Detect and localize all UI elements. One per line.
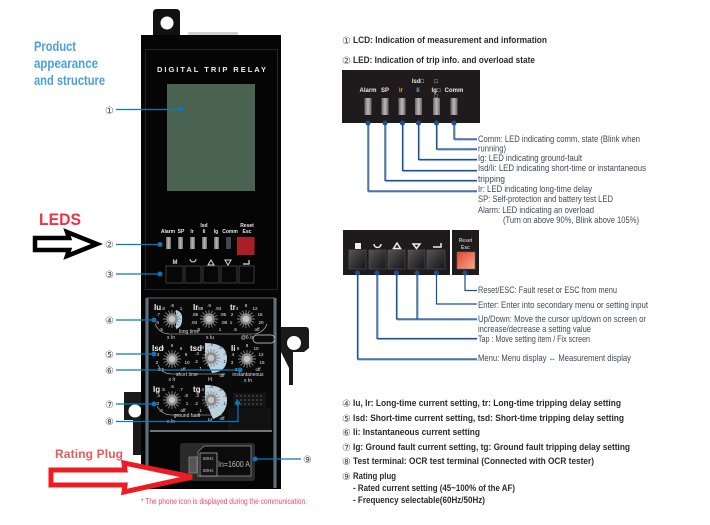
function buttons: M <box>172 260 178 266</box>
setting panel with dials: x Ir <box>169 377 176 383</box>
setting panel with dials <box>150 298 272 430</box>
setting panel with dials: .88 <box>197 306 204 311</box>
sector: tsd <box>205 343 227 373</box>
setting panel with dials: 5 <box>171 343 174 348</box>
title: and structure <box>34 72 105 88</box>
panel: LED detail: □ <box>434 94 438 100</box>
callout 2: ② <box>105 240 114 251</box>
setting panel with dials: .3 <box>195 351 199 356</box>
settings descriptions: Isd: Short-time current setting, tsd: Short-time tripping delay setting <box>353 413 624 424</box>
panel: reset detail: Esc <box>461 245 470 251</box>
setting panel with dials: .1 <box>198 366 202 371</box>
setting panel with dials: 8 <box>245 303 248 308</box>
setting panel with dials: I²t <box>208 418 213 424</box>
button descriptions: Menu: Menu display ↔ Measurement display <box>478 353 631 364</box>
sector: Iu <box>176 310 182 329</box>
setting panel with dials: .98 <box>221 320 228 325</box>
setting panel with dials: 2 <box>156 360 159 365</box>
setting panel with dials: .1 <box>222 401 226 406</box>
LED descriptions: tripping <box>478 174 505 185</box>
setting panel with dials: 1 <box>186 401 189 406</box>
LED descriptions: Comm: LED indicating comm. state (Blink when <box>478 134 640 145</box>
setting panel with dials: .6 <box>170 384 174 389</box>
Rating Plug label: Rating Plug <box>55 447 123 461</box>
setting panel with dials: 6 <box>180 346 183 351</box>
mounting tabs <box>124 9 309 455</box>
callout 6: ⑥ <box>105 366 114 377</box>
LED indicators: Ir <box>190 229 194 235</box>
LED descriptions: Ir: LED indicating long-time delay <box>478 184 592 195</box>
setting panel with dials: .4 <box>209 342 213 347</box>
reset button <box>237 237 254 255</box>
setting panel with dials: .1 <box>198 408 202 413</box>
setting panel with dials: .4 <box>200 345 204 350</box>
title: appearance <box>34 55 98 71</box>
setting panel with dials: 1.5 <box>158 367 165 372</box>
settings descriptions: Ii: Instantaneous current setting <box>353 427 480 438</box>
button descriptions: Reset/ESC: Fault reset or ESC from menu <box>478 285 617 296</box>
setting panel with dials: 8 <box>246 343 249 348</box>
panel: LED detail: Comm <box>445 88 463 94</box>
title <box>34 38 105 88</box>
callout 2 <box>105 240 162 251</box>
panel: reset detail <box>452 230 479 275</box>
setting panel with dials: 10 <box>253 346 259 351</box>
test terminal <box>229 393 270 431</box>
setting panel with dials: 4 <box>232 352 235 357</box>
settings descriptions: Ig: Ground fault current setting, tg: Ground fault tripping delay setting <box>353 442 630 453</box>
setting panel with dials: .3 <box>218 387 222 392</box>
LED indicators: Alarm <box>161 229 176 235</box>
panel: LED detail: □ <box>434 79 438 85</box>
setting panel with dials: off <box>255 367 261 372</box>
callout 8: ⑧ <box>105 417 114 428</box>
setting panel with dials: Isd <box>152 344 164 353</box>
description: LED: LED: Indication of trip info. and overload state <box>353 55 535 66</box>
LED indicators: Ii <box>203 229 206 235</box>
callout 1: ① <box>105 106 114 117</box>
callout 4: ④ <box>105 316 114 327</box>
settings descriptions: Rating plug <box>353 471 396 482</box>
setting panel with dials: 4 <box>162 346 165 351</box>
rating plug: 60Hz <box>203 456 214 461</box>
setting panel with dials: .3 <box>195 393 199 398</box>
function buttons <box>166 259 254 283</box>
panel: LED detail: Ir <box>399 88 404 94</box>
settings descriptions: - Rated current setting (45~100% of the AF) <box>353 483 515 494</box>
settings descriptions: - Frequency selectable(60Hz/50Hz) <box>353 495 485 506</box>
setting panel with dials: .9 <box>170 303 174 308</box>
setting panel with dials: .7 <box>156 312 160 317</box>
setting panel with dials: instantaneous <box>232 372 264 378</box>
setting panel with dials: off <box>180 408 186 413</box>
LED descriptions: SP: Self-protection and battery test LED <box>478 194 613 205</box>
button descriptions: Tap : Move setting item / Fix screen <box>478 334 590 345</box>
setting panel with dials: .5 <box>233 327 237 332</box>
sector: tg <box>205 385 227 419</box>
setting panel with dials: 6 <box>237 346 240 351</box>
button descriptions: increase/decrease a setting value <box>478 324 591 335</box>
setting panel with dials: 10 <box>184 360 190 365</box>
device: digital trip relay <box>124 9 309 489</box>
setting panel with dials: .4 <box>209 384 213 389</box>
setting panel with dials: long time <box>179 329 199 335</box>
panel: LED detail <box>342 70 480 123</box>
relay body <box>141 35 281 489</box>
settings descriptions: ⑦ <box>342 443 351 454</box>
setting panel with dials: .2 <box>223 351 227 356</box>
settings descriptions: Test terminal: OCR test terminal (Connected with OCR tester) <box>353 456 594 467</box>
setting panel with dials: .83 <box>191 320 198 325</box>
setting panel with dials: .6 <box>155 320 159 325</box>
LED descriptions <box>478 134 646 226</box>
setting panel with dials: 12 <box>258 352 264 357</box>
panel: reset detail: Reset <box>459 238 473 244</box>
LED indicators <box>161 223 254 249</box>
callout 5: ⑤ <box>105 350 114 361</box>
callout 4 <box>105 316 156 327</box>
LED indicators: Esc <box>243 229 252 235</box>
setting panel with dials: 2 <box>231 312 234 317</box>
LED descriptions: Ig: LED indicating ground-fault <box>478 153 582 164</box>
callout 8 <box>105 400 240 428</box>
callout 6 <box>105 366 242 377</box>
callout 3 <box>105 270 162 281</box>
LED indicators: SP <box>178 229 185 235</box>
callout 1 <box>105 106 184 117</box>
LEDS label: LEDS <box>39 210 81 229</box>
setting panel with dials: .4 <box>200 387 204 392</box>
transparent cover <box>145 298 277 488</box>
settings descriptions: ④ <box>342 399 351 410</box>
setting panel with dials: .7 <box>179 387 183 392</box>
button descriptions: Up/Down: Move the cursor up/down on screen or <box>478 314 646 325</box>
setting panel with dials: 1 <box>180 306 183 311</box>
setting panel with dials: 16 <box>257 312 263 317</box>
LCD screen <box>167 84 255 191</box>
setting panel with dials: off <box>254 327 260 332</box>
setting panel with dials: .2 <box>159 408 163 413</box>
LED indicators: Reset <box>240 223 254 229</box>
arrow: red to rating plug <box>51 463 192 492</box>
setting panel with dials: Ii <box>231 344 235 353</box>
setting panel with dials: tsd <box>190 344 202 353</box>
settings descriptions <box>342 398 630 506</box>
LED indicators: Isd <box>200 223 208 229</box>
settings descriptions: ⑥ <box>342 428 351 439</box>
LED indicators: Comm <box>222 229 238 235</box>
setting panel with dials: .8 <box>184 393 188 398</box>
setting panel with dials: 1 <box>219 327 222 332</box>
setting panel with dials: .8 <box>196 327 200 332</box>
setting panel with dials: .93 <box>215 306 222 311</box>
settings descriptions: ⑤ <box>342 414 351 425</box>
setting panel with dials: 4 <box>236 306 239 311</box>
arrow: black to LEDs <box>35 232 97 256</box>
button descriptions <box>478 285 648 364</box>
button descriptions: Enter: Enter into secondary menu or setting input <box>478 300 648 311</box>
setting panel with dials: Iu <box>154 303 161 312</box>
setting panel with dials: .95 <box>220 312 227 317</box>
setting panel with dials: .2 <box>223 393 227 398</box>
device heading: DIGITAL TRIP RELAY <box>157 65 266 74</box>
setting panel with dials: off <box>180 367 186 372</box>
setting panel with dials: .3 <box>218 345 222 350</box>
setting panel with dials: x In <box>244 378 252 384</box>
rating plug: 50Hz <box>203 468 214 473</box>
callout 7: ⑦ <box>105 400 114 411</box>
LED descriptions: Isd/Ii: LED indicating short-time or instantaneous <box>478 163 646 174</box>
setting panel with dials: 1 <box>230 320 233 325</box>
setting panel with dials: 3 <box>157 352 160 357</box>
connector lines: LED <box>366 120 477 192</box>
callout 5 <box>105 350 156 361</box>
setting panel with dials: ground fault <box>174 413 201 419</box>
setting panel with dials: 3 <box>231 360 234 365</box>
panel: LED detail: Alarm <box>359 88 377 94</box>
setting panel with dials: I²t <box>208 377 213 383</box>
setting panel with dials: .9 <box>207 303 211 308</box>
panel: LED detail: Ii <box>416 88 420 94</box>
callout 9: ⑨ <box>303 455 312 466</box>
callout 9 <box>252 455 312 466</box>
setting panel with dials: .3 <box>155 401 159 406</box>
setting panel with dials: 15 <box>259 360 265 365</box>
LED descriptions: (Turn on above 90%, Blink above 105%) <box>503 215 639 226</box>
setting panel with dials: Ir <box>193 303 198 312</box>
setting panel with dials: tr <box>230 303 236 312</box>
setting panel with dials: .5 <box>161 387 165 392</box>
panel: button detail <box>343 230 450 275</box>
panel: LED detail: Ig□ <box>432 88 441 94</box>
setting panel with dials: x In <box>167 419 175 425</box>
setting panel with dials: .5 <box>159 327 163 332</box>
description: LCD: ① <box>342 36 351 47</box>
setting panel with dials: .85 <box>192 312 199 317</box>
panel: LED detail: Isd□ <box>412 79 425 85</box>
setting panel with dials: 2 <box>235 367 238 372</box>
rating plug: In=1600 A <box>218 459 250 469</box>
setting panel with dials: short time <box>176 372 198 378</box>
footnote: * The phone icon is displayed during the communication. <box>141 497 307 506</box>
setting panel with dials: 20 <box>258 320 264 325</box>
setting panel with dials: x Iu <box>206 335 214 341</box>
setting panel with dials: 12 <box>252 306 258 311</box>
setting panel with dials: tg <box>193 385 201 394</box>
callout 7 <box>105 400 156 411</box>
title: Product <box>34 38 76 54</box>
setting panel with dials: .1 <box>222 359 226 364</box>
settings descriptions: ⑧ <box>342 457 351 468</box>
LED descriptions: running) <box>478 144 506 154</box>
connector lines: buttons <box>355 270 477 360</box>
setting panel with dials: off <box>219 373 225 378</box>
panel: LED detail: SP <box>381 88 389 94</box>
setting panel with dials: .4 <box>156 393 160 398</box>
LED descriptions: Alarm: LED indicating an overload <box>478 205 594 216</box>
setting panel with dials: @6 Ir <box>241 335 253 341</box>
setting panel with dials: .2 <box>194 401 198 406</box>
callout 3: ③ <box>105 270 114 281</box>
setting panel with dials: Ig <box>153 385 160 394</box>
setting panel with dials: .8 <box>161 306 165 311</box>
setting panel with dials: .2 <box>194 359 198 364</box>
setting panel with dials: 8 <box>185 352 188 357</box>
setting panel with dials: x In <box>167 335 175 341</box>
LED indicators: Ig <box>214 229 218 235</box>
settings descriptions: ⑨ <box>342 472 351 483</box>
settings descriptions: Iu, Ir: Long-time current setting, tr: Long-time tripping delay setting <box>353 398 621 409</box>
rating plug <box>180 443 255 481</box>
setting panel with dials: off <box>219 416 225 421</box>
description: LCD: LCD: Indication of measurement and information <box>353 35 547 46</box>
description: LED: ② <box>342 56 351 67</box>
